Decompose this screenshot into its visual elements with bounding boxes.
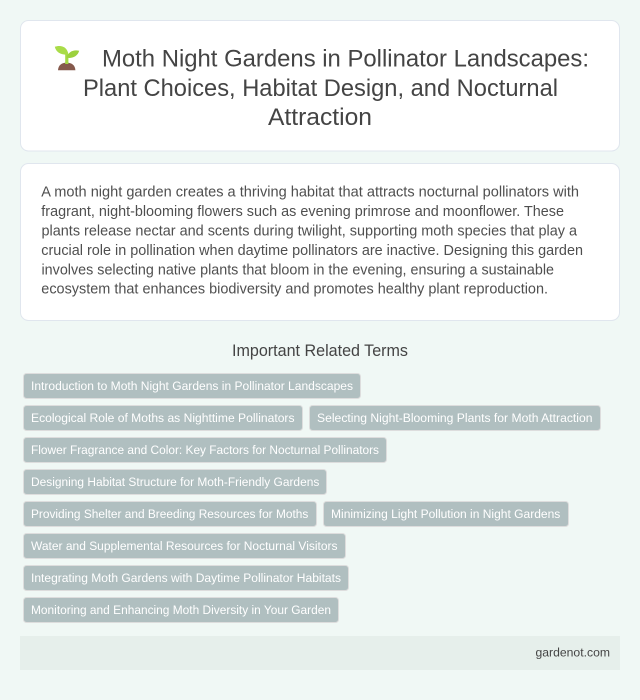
chip: monitoring: Monitoring and Enhancing Moth Diversity in Your Garden [31,603,331,617]
chip: habitat structure [24,470,326,494]
chip: integrating [24,566,348,590]
panel: description card [20,164,620,320]
title: Moth Night Gardens in Pollinator Landscapes: [102,46,589,73]
panel: term chips [24,374,600,622]
panel: title card [20,20,620,151]
chip: introduction: Introduction to Moth Night Gardens in Pollinator Landscapes [31,379,353,393]
chip: water [24,534,346,558]
text block: description [41,185,583,298]
chip: light pollution [324,502,568,526]
chip: habitat structure: Designing Habitat Structure for Moth-Friendly Gardens [31,475,319,489]
chip: selecting plants: Selecting Night-Blooming Plants for Moth Attraction [317,411,593,425]
chip: flower fragrance [24,438,386,462]
heading: important related terms: Important Related Terms [232,342,408,360]
icon: seedling [55,46,79,70]
title: Attraction [268,104,372,131]
title [83,46,589,131]
chip: flower fragrance: Flower Fragrance and Color: Key Factors for Nocturnal Pollinators [31,443,379,457]
chip: shelter: Providing Shelter and Breeding Resources for Moths [31,507,308,521]
chip: introduction [24,374,360,398]
footer: gardenot.com [536,646,610,660]
title: Plant Choices, Habitat Design, and Nocturnal [83,75,558,102]
chip: monitoring [24,598,338,622]
chip: ecological role [24,406,302,430]
text block: description: plants release nectar and scents during twilight, supporting moth species that play a [42,224,578,240]
chip: shelter [24,502,316,526]
text block: description: crucial role in pollination when daytime pollinators are inactive. Designing this garden [41,243,583,259]
text block: description: ecosystem that enhances biodiversity and promotes healthy plant reproduction. [41,282,548,298]
text block: description: A moth night garden creates a thriving habitat that attracts nocturnal pollinators with [41,185,579,201]
chip: selecting plants [310,406,600,430]
chip: light pollution: Minimizing Light Pollution in Night Gardens [331,507,560,521]
chip: integrating: Integrating Moth Gardens with Daytime Pollinator Habitats [31,571,341,585]
text block: description: involves selecting native plants that bloom in the evening, ensuring a sustainable [42,262,554,278]
chip: water: Water and Supplemental Resources for Nocturnal Visitors [31,539,338,553]
chip: ecological role: Ecological Role of Moths as Nighttime Pollinators [31,411,294,425]
footer [20,636,620,670]
text block: description: fragrant, night-blooming flowers such as evening primrose and moonflower. These [41,204,564,220]
